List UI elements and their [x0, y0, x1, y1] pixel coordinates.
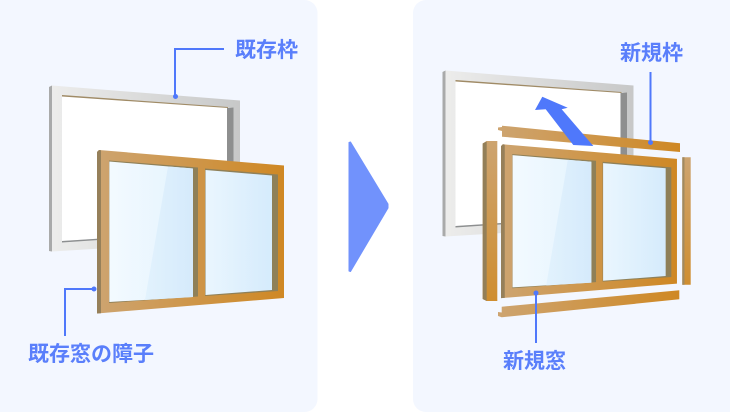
label: existing frame: 既存枠 [235, 39, 298, 62]
arrow: to after [349, 142, 388, 272]
new frame: top piece [498, 126, 680, 152]
new frame: left piece [483, 141, 497, 301]
arrow: removal direction [535, 97, 593, 146]
existing frame (left) [49, 86, 240, 252]
label: new frame [620, 42, 683, 145]
panel: after [413, 0, 730, 412]
label: new window: 新規窓 [503, 350, 566, 373]
panel: before [0, 0, 318, 412]
existing window sash (left) [97, 150, 284, 314]
label: existing window sash: 既存窓の障子 [28, 343, 154, 366]
label: new window [503, 290, 566, 373]
label: existing frame [173, 39, 298, 99]
label: new frame: 新規枠 [620, 42, 683, 65]
label: existing window sash [28, 286, 154, 366]
existing frame (right) [442, 70, 634, 236]
new window [501, 144, 677, 298]
new frame: bottom piece [498, 290, 679, 317]
new frame: right piece [682, 157, 691, 285]
